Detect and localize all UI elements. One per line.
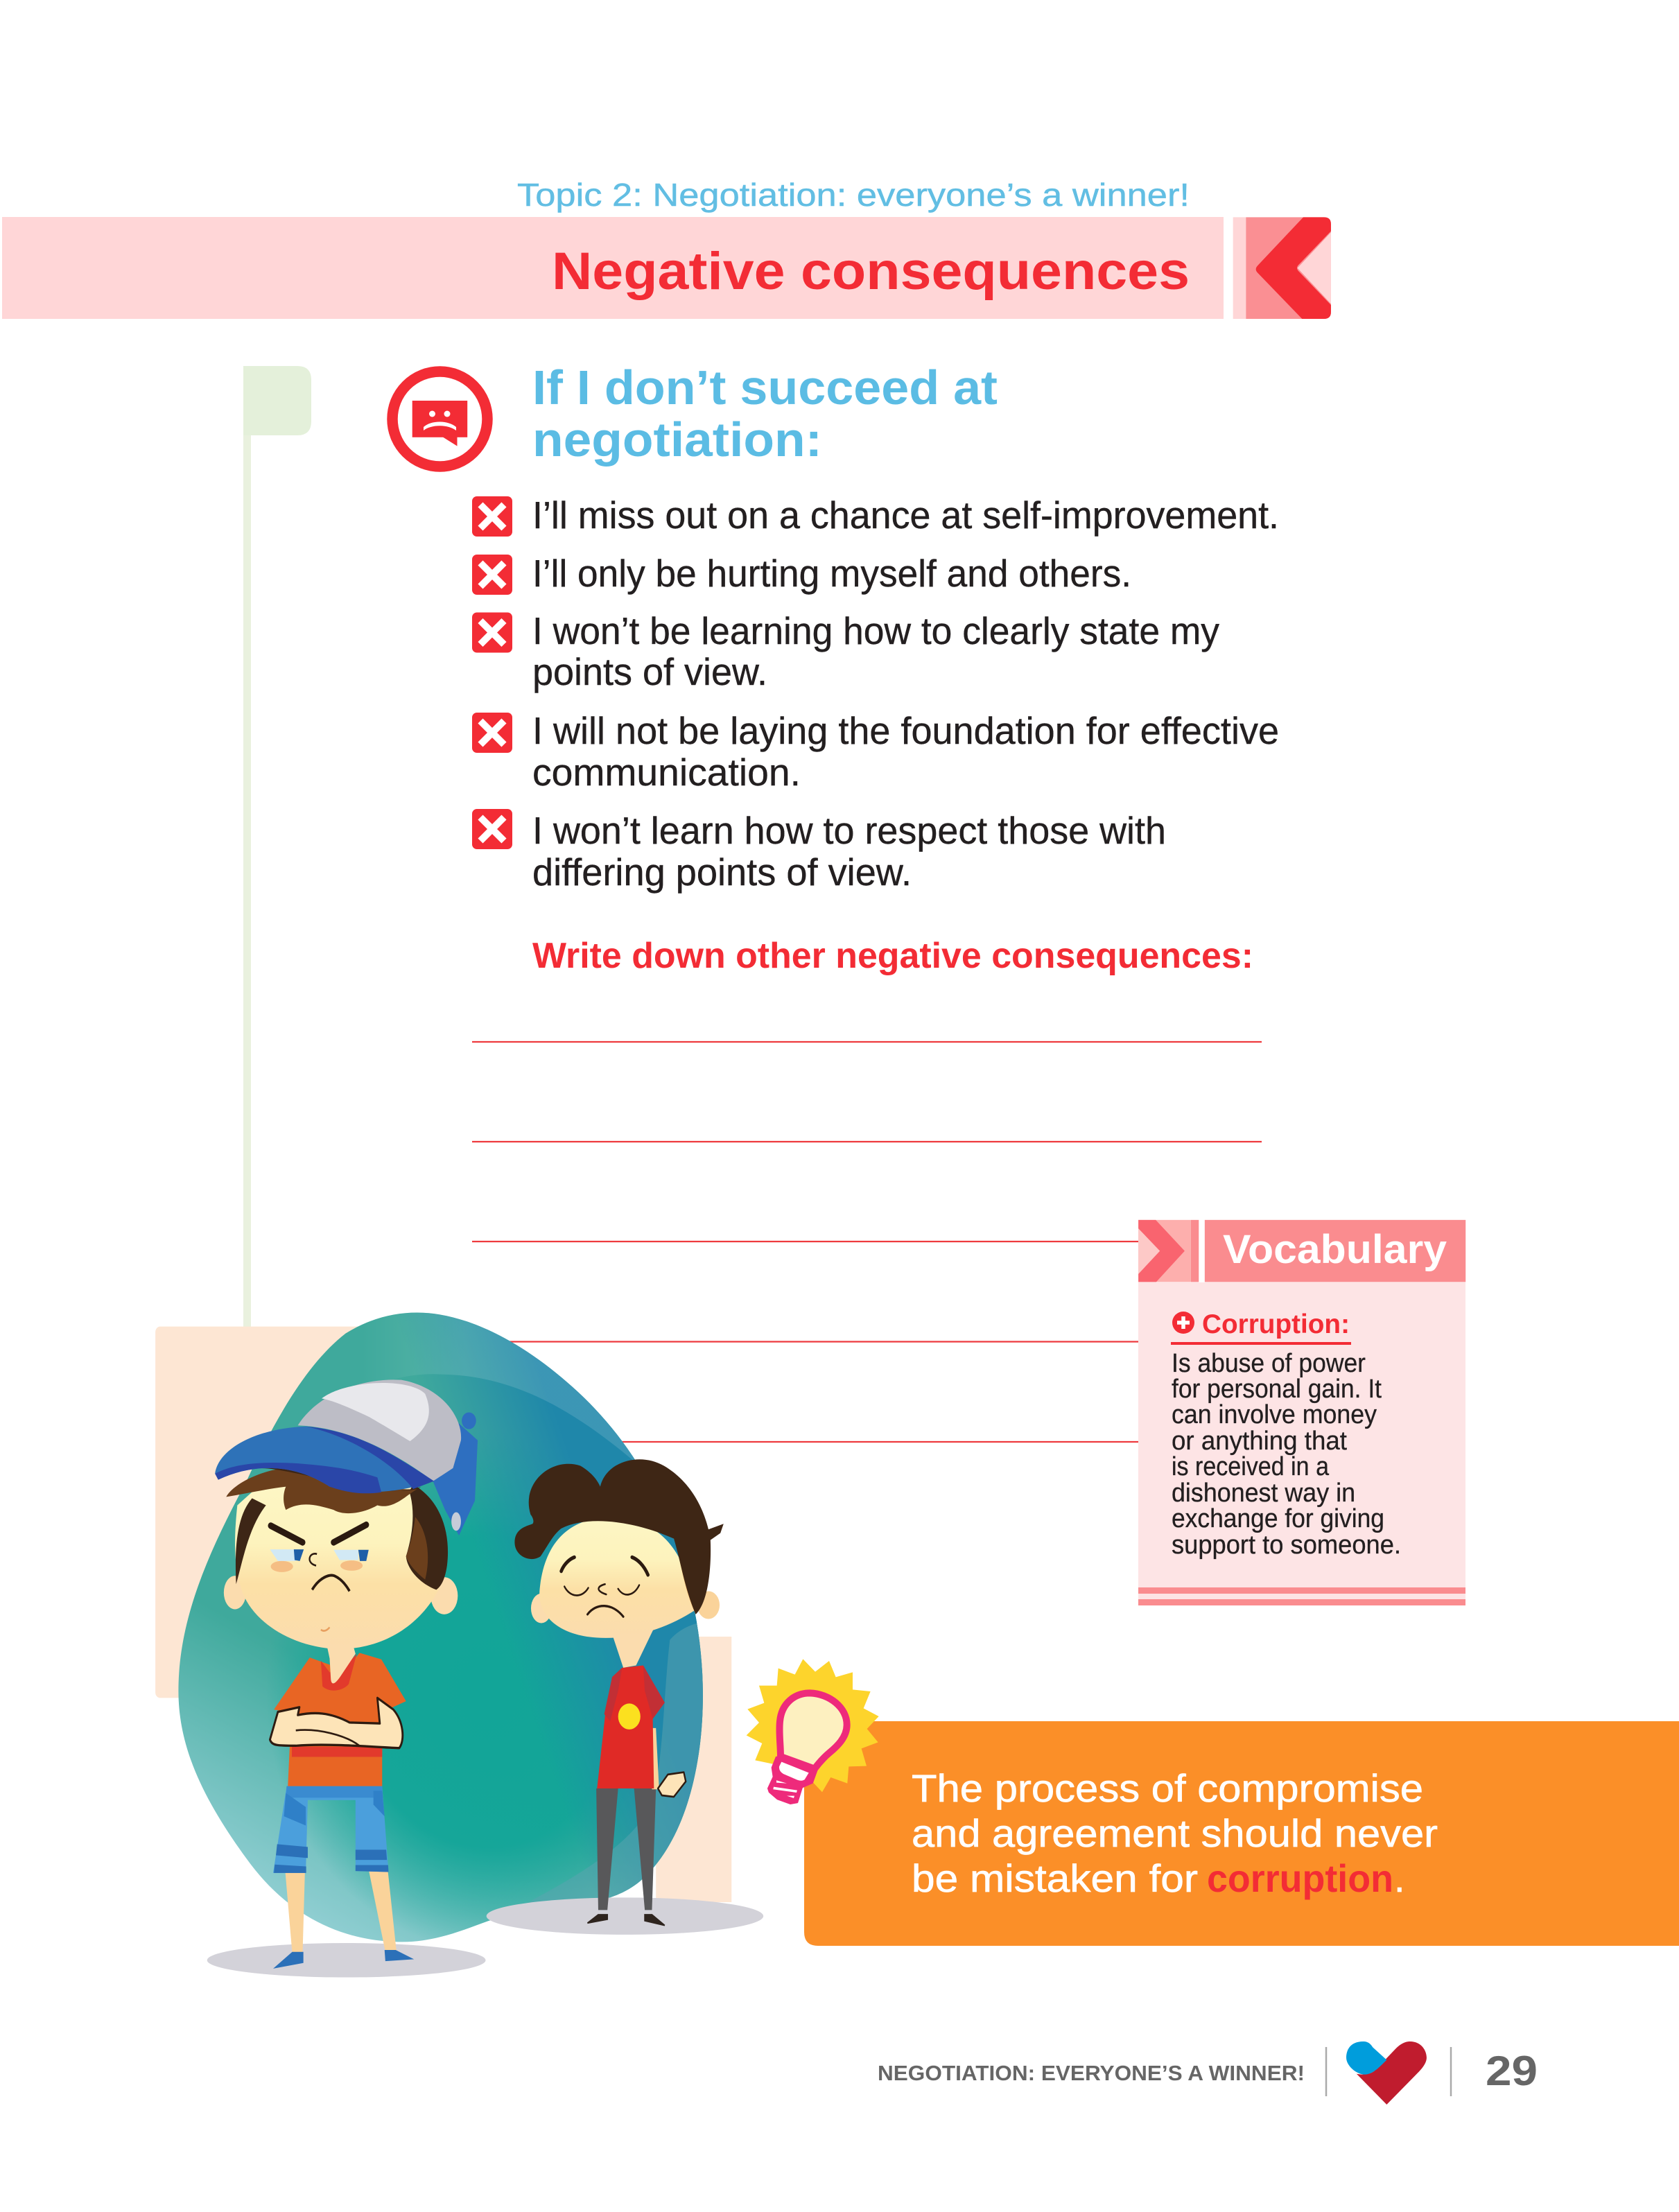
legs xyxy=(587,1788,665,1926)
ears xyxy=(531,1591,720,1623)
crossed arms xyxy=(270,1698,403,1748)
vocabulary header: Vocabulary xyxy=(1223,1227,1447,1272)
ears xyxy=(224,1576,458,1614)
hair xyxy=(514,1459,724,1614)
legs and shoes xyxy=(273,1870,414,1969)
callout: compromise xyxy=(804,1721,1679,1946)
teal blob xyxy=(178,1313,703,1942)
item 3: points of view. xyxy=(532,650,767,693)
arm and hand xyxy=(650,1728,686,1797)
writing prompt: Write down other negative consequences: xyxy=(532,936,1253,976)
definition: exchange for giving xyxy=(1172,1504,1384,1533)
shorts xyxy=(273,1786,388,1873)
icon: heart logo xyxy=(1346,2041,1427,2105)
item 5: I won’t learn how to respect those with xyxy=(532,809,1166,852)
cap xyxy=(215,1379,478,1535)
footer title: NEGOTIATION: EVERYONE’S A WINNER! xyxy=(878,2061,1305,2085)
callout text xyxy=(912,1766,1438,1900)
writing lines xyxy=(472,1042,1262,1442)
arm fold line xyxy=(296,1730,360,1745)
item 5: differing points of view. xyxy=(532,851,912,894)
shirt xyxy=(597,1666,665,1788)
icon: light bulb xyxy=(747,1659,879,1804)
item 4: I will not be laying the foundation for effective xyxy=(532,709,1279,752)
item 3: I won’t be learning how to clearly state my xyxy=(532,609,1219,652)
item 1: I’ll miss out on a chance at self-improvement. xyxy=(532,494,1279,537)
callout text: The process of compromise xyxy=(912,1766,1423,1810)
callout text: corruption xyxy=(1207,1856,1393,1900)
definition: support to someone. xyxy=(1172,1531,1401,1560)
definition: or anything that xyxy=(1172,1427,1347,1456)
callout text: . xyxy=(1394,1856,1405,1900)
definition: for personal gain. It xyxy=(1172,1375,1382,1404)
subheading: negotiation: xyxy=(532,412,822,467)
banner chevron tab xyxy=(1233,217,1331,319)
boy with sad face xyxy=(514,1459,724,1926)
item 4: communication. xyxy=(532,751,801,794)
angry features xyxy=(270,1525,369,1631)
title banner xyxy=(2,217,1224,319)
item 2: I’ll only be hurting myself and others. xyxy=(532,552,1131,595)
term: corruption: Corruption: xyxy=(1202,1309,1350,1339)
subheading xyxy=(532,360,998,467)
bottom stripes xyxy=(1138,1587,1465,1605)
shirt xyxy=(274,1640,406,1786)
term: corruption xyxy=(1171,1309,1351,1345)
list of consequences xyxy=(472,494,1279,894)
definition: is received in a xyxy=(1172,1452,1330,1481)
topic heading: Topic 2: Negotiation: everyone’s a winner! xyxy=(517,177,1190,213)
boy with cap xyxy=(215,1379,478,1969)
definition xyxy=(1172,1349,1401,1560)
face xyxy=(539,1517,696,1638)
icon: sad speech bubble xyxy=(392,372,487,467)
definition: can involve money xyxy=(1172,1400,1377,1429)
sad features xyxy=(562,1557,648,1617)
callout text: and agreement should never xyxy=(912,1811,1438,1855)
item 4 xyxy=(472,709,1279,794)
footer xyxy=(878,2041,1538,2105)
subheading: If I don’t succeed at xyxy=(532,360,998,415)
definition: Is abuse of power xyxy=(1172,1349,1366,1378)
item 5 xyxy=(472,809,1166,894)
page number: 29 xyxy=(1486,2048,1538,2094)
face xyxy=(235,1487,440,1649)
green flag and vertical bar xyxy=(243,366,311,1330)
panel: vocabulary xyxy=(1138,1220,1465,1605)
hair xyxy=(226,1466,448,1590)
title: Negative consequences xyxy=(552,242,1190,301)
peach background panels xyxy=(155,1327,731,1902)
illustration: two unhappy boys xyxy=(155,1301,763,1978)
callout text: be mistaken for xyxy=(912,1856,1198,1900)
vocabulary header xyxy=(1138,1220,1465,1282)
ground shadows xyxy=(207,1897,763,1978)
neck xyxy=(610,1628,654,1668)
definition: dishonest way in xyxy=(1172,1479,1355,1508)
item 3 xyxy=(472,609,1219,693)
